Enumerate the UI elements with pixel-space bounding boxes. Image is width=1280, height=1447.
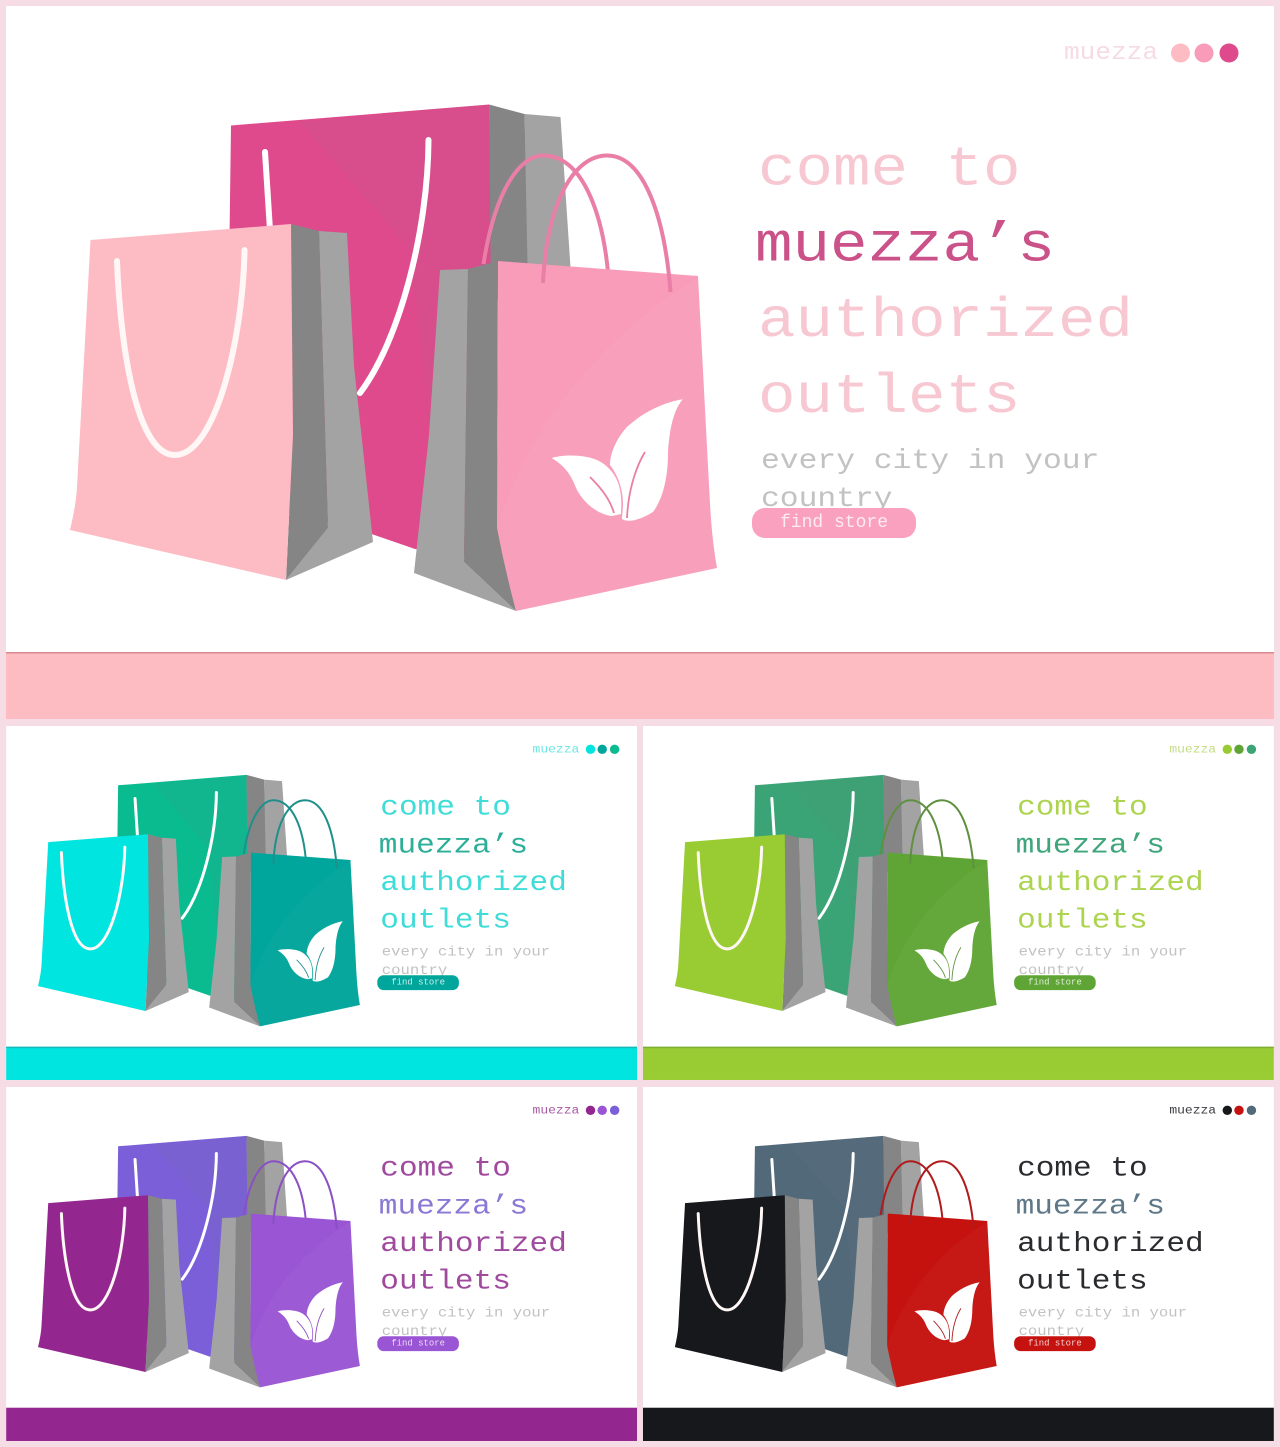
headline: come to <box>758 138 1020 202</box>
subtitle: country <box>1019 1324 1084 1340</box>
bag: left <box>38 834 189 1011</box>
button: find store <box>1028 1339 1082 1349</box>
bag: left <box>38 1195 189 1372</box>
footer band <box>6 1408 637 1441</box>
button: find store <box>391 978 445 988</box>
logo <box>1169 742 1256 756</box>
headline: outlets <box>380 1267 511 1298</box>
headline: outlets <box>1017 1267 1148 1298</box>
headline: come to <box>1017 1154 1148 1185</box>
footer band <box>643 1047 1274 1080</box>
panel: black and red slide <box>643 1087 1274 1441</box>
logo <box>1169 1103 1256 1117</box>
footer band <box>643 1408 1274 1441</box>
logo: muezza <box>533 1103 579 1117</box>
bag: left <box>675 834 826 1011</box>
button: find store <box>391 1339 445 1349</box>
bag: back <box>752 1136 925 1362</box>
panel: teal slide <box>6 726 637 1080</box>
headline: outlets <box>758 365 1020 429</box>
headline: muezza’s <box>755 214 1055 278</box>
button <box>377 975 459 990</box>
subtitle: country <box>1019 963 1084 979</box>
headline: come to <box>380 1154 511 1185</box>
bag: back <box>226 104 572 560</box>
logo: muezza <box>1169 742 1216 756</box>
subtitle: every city in your <box>1019 1305 1187 1321</box>
button: find store <box>1028 978 1082 988</box>
bag: right with leaf logo <box>846 1161 997 1387</box>
headline: authorized <box>758 289 1133 353</box>
headline: muezza’s <box>1016 1191 1165 1222</box>
subtitle: every city in your <box>1019 944 1187 960</box>
bag: right with leaf logo <box>209 1161 360 1387</box>
subtitle: country <box>761 484 893 515</box>
headline: outlets <box>1017 906 1148 937</box>
illustration: shopping bags <box>675 1136 997 1387</box>
subtitle <box>382 1305 550 1340</box>
logo: muezza <box>1169 1103 1216 1117</box>
bag: right with leaf logo <box>414 156 717 611</box>
headline: authorized <box>380 1229 567 1260</box>
headline <box>755 138 1133 429</box>
illustration: shopping bags <box>38 775 360 1026</box>
bag: left <box>675 1195 826 1372</box>
button: find store <box>780 513 888 533</box>
bag: back <box>116 775 288 1001</box>
subtitle: every city in your <box>382 1305 550 1321</box>
headline: outlets <box>380 906 511 937</box>
headline <box>379 793 567 937</box>
bag: back <box>752 775 925 1001</box>
headline <box>1016 1154 1204 1298</box>
headline: authorized <box>1017 868 1204 899</box>
headline: come to <box>380 793 511 824</box>
logo <box>533 1103 619 1117</box>
illustration: shopping bags <box>675 775 997 1026</box>
logo: muezza <box>1064 40 1158 67</box>
panel: purple slide <box>6 1087 637 1441</box>
headline <box>379 1154 567 1298</box>
bag: right with leaf logo <box>846 800 997 1026</box>
bag: back <box>116 1136 288 1362</box>
panel: pink slide <box>6 6 1274 719</box>
subtitle <box>382 944 550 979</box>
subtitle <box>761 446 1099 515</box>
illustration: shopping bags <box>70 104 717 611</box>
button <box>1014 975 1096 990</box>
bag: left <box>70 224 373 580</box>
subtitle: every city in your <box>382 944 550 960</box>
logo <box>1064 40 1238 67</box>
subtitle: every city in your <box>761 446 1099 477</box>
headline: authorized <box>380 868 567 899</box>
headline: muezza’s <box>1016 830 1165 861</box>
logo: muezza <box>533 742 579 756</box>
panel: green slide <box>643 726 1274 1080</box>
button <box>1014 1336 1096 1351</box>
headline: muezza’s <box>379 1191 528 1222</box>
logo <box>533 742 619 756</box>
illustration: shopping bags <box>38 1136 360 1387</box>
headline: muezza’s <box>379 830 528 861</box>
subtitle <box>1019 944 1187 979</box>
footer band <box>6 1047 637 1080</box>
subtitle <box>1019 1305 1187 1340</box>
subtitle: country <box>382 1324 447 1340</box>
headline: authorized <box>1017 1229 1204 1260</box>
subtitle: country <box>382 963 447 979</box>
headline <box>1016 793 1204 937</box>
headline: come to <box>1017 793 1148 824</box>
button <box>752 508 916 538</box>
footer band <box>6 652 1274 719</box>
bag: right with leaf logo <box>209 800 360 1026</box>
button <box>377 1336 459 1351</box>
